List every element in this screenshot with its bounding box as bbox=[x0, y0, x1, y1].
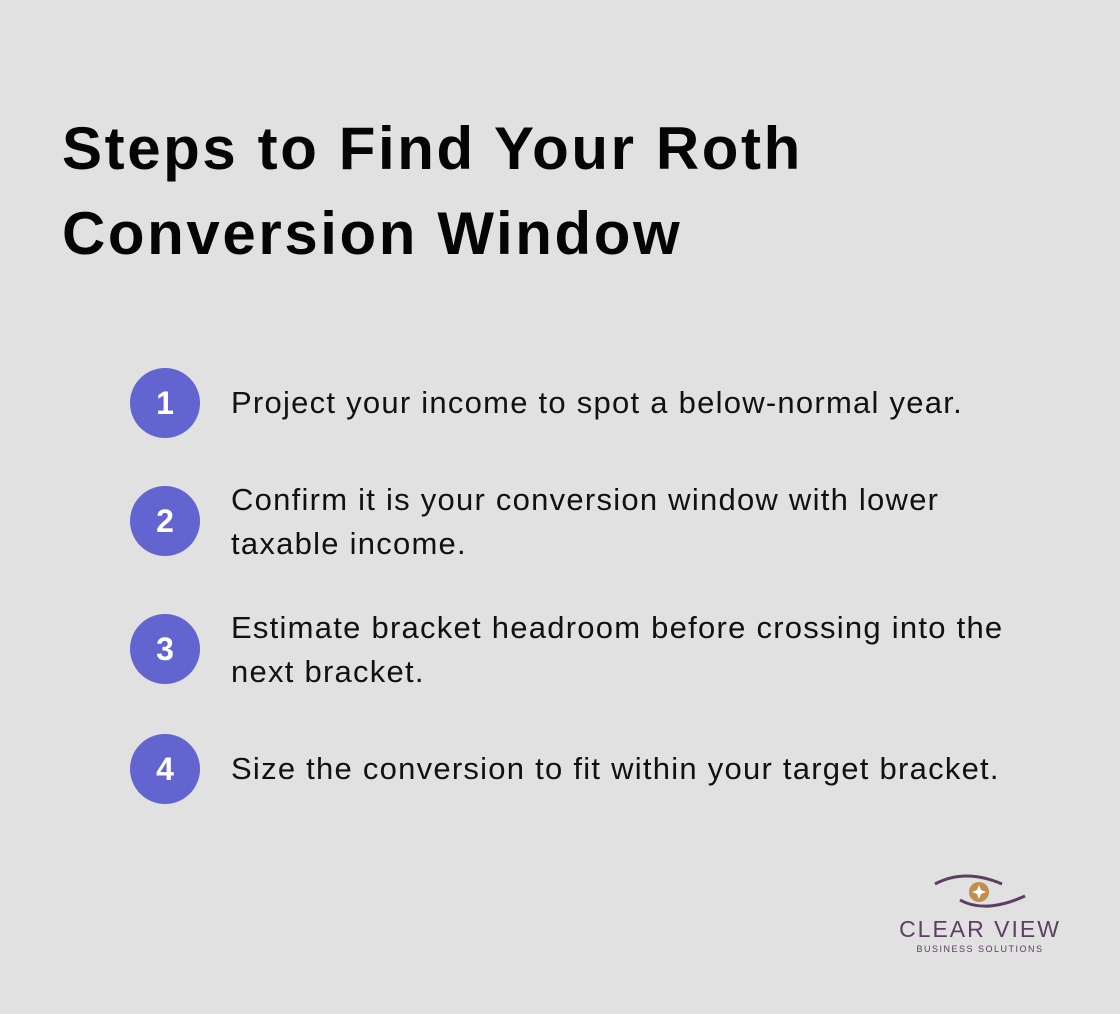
title: Steps to Find Your Roth bbox=[62, 115, 803, 182]
step 1: 1 bbox=[156, 385, 174, 421]
step 2: 2 bbox=[156, 503, 174, 539]
step 4: Size the conversion to fit within your target bracket. bbox=[231, 751, 1000, 786]
step 4: 4 bbox=[156, 751, 174, 787]
logo: BUSINESS SOLUTIONS bbox=[916, 944, 1044, 954]
step 3: Estimate bracket headroom before crossing into the bbox=[231, 610, 1003, 645]
step 3: 3 bbox=[156, 631, 174, 667]
logo text: CLEAR VIEW bbox=[899, 916, 1061, 942]
step 1: Project your income to spot a below-normal year. bbox=[231, 385, 963, 420]
step 2 bbox=[130, 482, 939, 561]
icon: eye bbox=[934, 874, 1026, 908]
step 4 bbox=[130, 734, 1000, 804]
step 2: Confirm it is your conversion window with lower bbox=[231, 482, 939, 517]
title bbox=[62, 115, 803, 267]
step 1 bbox=[130, 368, 963, 438]
step 2: taxable income. bbox=[231, 526, 467, 561]
logo bbox=[899, 874, 1061, 954]
title: Conversion Window bbox=[62, 200, 682, 267]
step 3 bbox=[130, 610, 1003, 689]
step 3: next bracket. bbox=[231, 654, 425, 689]
